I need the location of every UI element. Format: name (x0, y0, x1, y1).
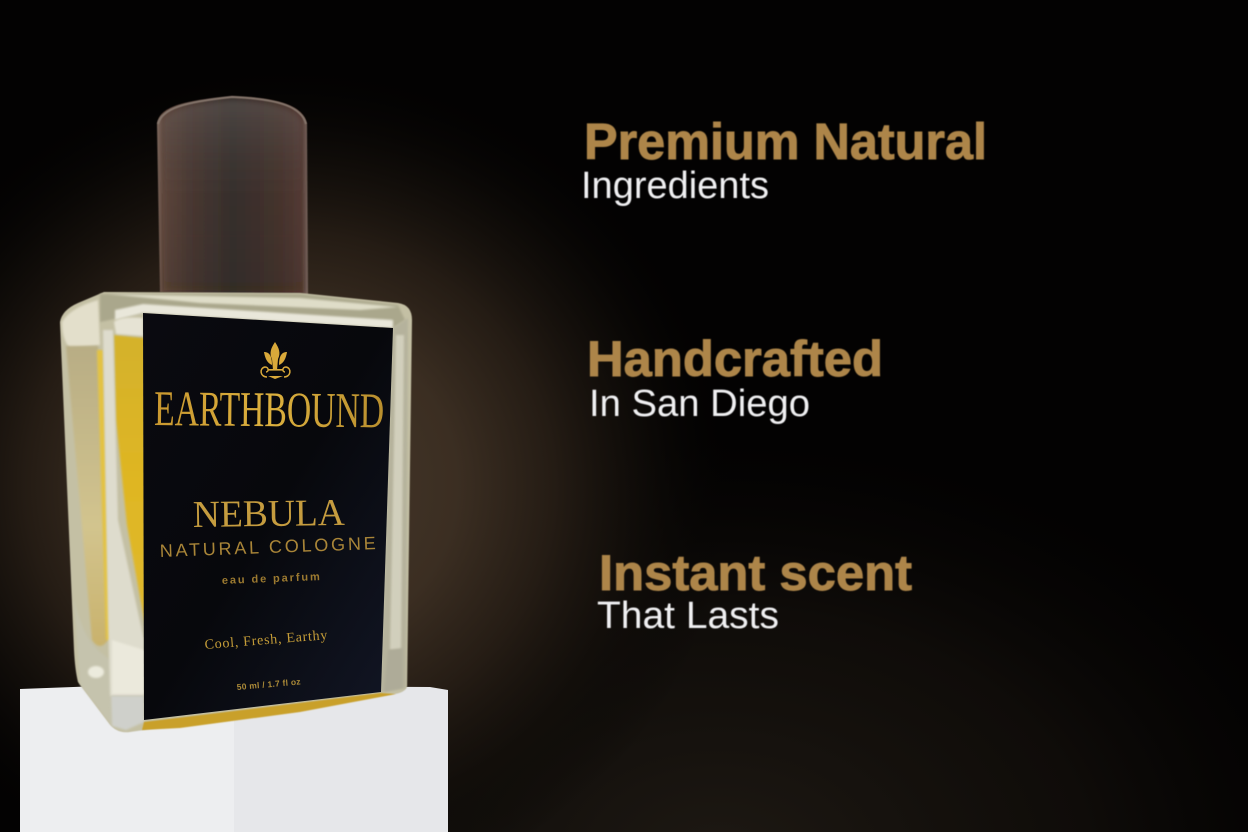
icon: fleur-de-lis (261, 342, 290, 379)
feature: premium natural ingredients: Premium Natural (584, 113, 987, 170)
feature: handcrafted in san diego: Handcrafted (587, 331, 883, 387)
shoulder highlight (62, 300, 100, 348)
product type: NATURAL COLOGNE (159, 533, 376, 561)
inner glass highlight (114, 318, 143, 336)
bottom gold band (142, 693, 396, 730)
icon: wooden cap (157, 96, 308, 296)
perfume bottle (60, 96, 412, 732)
left side panel (66, 346, 108, 646)
bright glass edge (103, 330, 144, 696)
feature: premium natural ingredients: Ingredients (581, 165, 769, 207)
glass top rim (100, 294, 405, 328)
feature: premium natural ingredients (581, 113, 987, 207)
pedestal (20, 686, 448, 832)
gold refraction strip (97, 350, 110, 640)
clear lower corner (74, 600, 112, 726)
feature: handcrafted in san diego: In San Diego (589, 383, 810, 425)
product name: NEBULA (193, 492, 346, 536)
right glass edge (381, 318, 408, 692)
product label (143, 313, 393, 720)
glass body (60, 292, 412, 732)
feature: instant scent that lasts (597, 545, 912, 637)
feature: instant scent that lasts: Instant scent (599, 545, 912, 601)
feature: instant scent that lasts: That Lasts (597, 595, 779, 637)
feature: handcrafted in san diego (587, 331, 883, 425)
scent notes: Cool, Fresh, Earthy (204, 628, 328, 653)
golden liquid (114, 335, 145, 625)
eau de parfum: eau de parfum (222, 571, 320, 587)
brand name: EARTHBOUND (154, 380, 384, 438)
volume: 50 ml / 1.7 fl oz (236, 676, 301, 692)
